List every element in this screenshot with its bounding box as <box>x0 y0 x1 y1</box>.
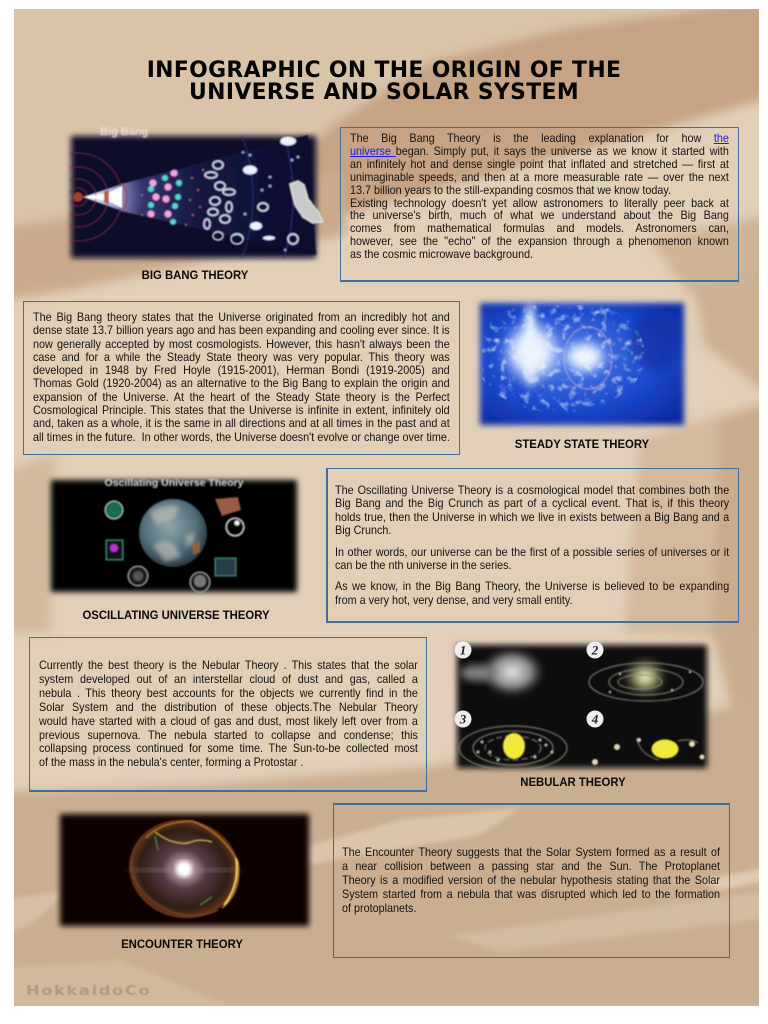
caption: oscillating universe theory: OSCILLATING UNIVERSE THEORY <box>82 608 270 622</box>
text block: steady state explanation: dense state 13.7 billion years ago and has been expanding and cooling ever since. It is <box>33 323 450 337</box>
text block: nebular explanation <box>38 658 418 769</box>
text block: nebular explanation: nebula . This theory best accounts for the objects we currently find in the <box>38 686 417 700</box>
text block: steady state explanation: all times in the future. In other words, the Universe doesn't evolve or change over time. <box>33 430 450 444</box>
image: big bang diagram <box>66 126 324 263</box>
text block: oscillating universe explanation: In other words, our universe can be the first of a possible series of universes or it <box>335 545 729 559</box>
icons: surrounding theory thumbnails <box>105 497 244 592</box>
image: oscillating universe <box>51 477 297 592</box>
text block: nebular explanation: Currently the best theory is the Nebular Theory . This states that the solar <box>38 658 417 672</box>
icon: thinker statue <box>290 181 323 223</box>
panel: encounter theory text <box>333 803 730 958</box>
text block: nebular explanation: of the mass in the nebula's center, forming a Protostar . <box>38 755 303 769</box>
text block: big bang explanation: 13.7 billion years to the still-expanding cosmos that we know today. <box>350 183 671 197</box>
text block: big bang explanation: as the cosmic microwave background. <box>350 247 533 261</box>
text block: steady state explanation: developed in 1948 by Fred Hoyle (1915-2001), Herman Bondi (1919-2005) and <box>33 363 450 377</box>
image title: oscillating universe: Oscillating Universe Theory <box>105 477 244 489</box>
text block: encounter explanation <box>342 845 720 915</box>
image label: big bang: Big Bang <box>100 126 148 138</box>
caption: steady state theory: STEADY STATE THEORY <box>515 437 649 451</box>
icons: stage numbers: 4 <box>591 712 599 726</box>
text block: big bang explanation: The Big Bang Theory is the leading explanation for how the <box>350 131 729 145</box>
text block: steady state explanation: The Big Bang theory states that the Universe originated from an incredibly hot and <box>33 310 450 324</box>
text block: oscillating universe explanation: holds true, then the Universe in which we live in exists between a Big Bang and a <box>335 510 729 524</box>
text block: oscillating universe explanation: Big Crunch. <box>335 523 391 537</box>
text block: big bang explanation: however, see the "echo" of the expansion through a phenomenon known <box>350 234 729 248</box>
icons: stage numbers <box>454 642 604 728</box>
text block: big bang explanation: an infinitely hot and dense single point that inflated and stretched — first at <box>350 157 729 171</box>
text block: oscillating universe explanation: from a very hot, very dense, and very small entity. <box>335 593 573 607</box>
text block: big bang explanation <box>350 131 729 261</box>
text block: steady state explanation: and, taken as a whole, it is the same in all directions and at all times in the past and at <box>33 416 450 430</box>
text block: nebular explanation: would have started with a cloud of gas and dust, most likely left over from a <box>38 714 417 728</box>
text block: steady state explanation: Cosmological Principle. This states that the Universe is infinite in extent, infinitely old <box>33 403 450 417</box>
panel: big bang text <box>340 127 739 282</box>
text block: oscillating universe explanation <box>335 483 730 607</box>
panel: steady state text <box>23 301 460 455</box>
text block: nebular explanation: system developed out of an interstellar cloud of dust and gas, called a <box>38 672 417 686</box>
icons: stage numbers: 3 <box>459 712 467 726</box>
text block: encounter explanation: System started from a nebula that was disrupted which led to the formation <box>342 887 720 901</box>
text block: oscillating universe explanation: As we know, in the Big Bang Theory, the Universe is believed to be expanding <box>335 579 729 593</box>
text block: oscillating universe explanation: can be the nth universe in the series. <box>335 558 512 572</box>
text block: big bang explanation: the universe's birth, much of what we understand about the Big Bang <box>350 208 729 222</box>
watermark: HokkaidoCo <box>26 983 151 999</box>
icon: earth <box>139 499 207 567</box>
text block: oscillating universe explanation: Big Bang and the Big Crunch as part of a cyclical event. That is, if this theory <box>335 496 729 510</box>
image: encounter theory nebula <box>60 810 309 928</box>
panel: oscillating universe text <box>326 468 739 623</box>
text block: nebular explanation: collapsing process continued for some time. The Sun-to-be collected most <box>38 741 417 755</box>
icons: stage numbers: 2 <box>591 642 599 658</box>
caption: nebular theory: NEBULAR THEORY <box>520 775 626 789</box>
title: UNIVERSE AND SOLAR SYSTEM <box>189 80 579 105</box>
image: steady state burst <box>480 303 684 425</box>
text block: encounter explanation: The Encounter Theory suggests that the Solar System formed as a result of <box>342 845 720 859</box>
text block: nebular explanation: previous supernova. The nebula started to collapse and condense; this <box>38 728 417 742</box>
text block: big bang explanation: unimaginable speeds, and then at a more measurable rate — over the next <box>350 170 729 184</box>
text block: big bang explanation: comes from mathematical formulas and models. Astronomers can, <box>350 221 729 235</box>
title <box>147 58 621 105</box>
text block: nebular explanation: Solar System and the distribution of these objects.The Nebular Theory <box>38 700 417 714</box>
text block: encounter explanation: of protoplanets. <box>342 901 416 915</box>
caption: encounter theory: ENCOUNTER THEORY <box>121 937 243 951</box>
text block: big bang explanation: universe began. Simply put, it says the universe as we know it started with <box>350 144 729 158</box>
text block: steady state explanation: case and for a while the Steady State theory was very popular. This theory was <box>33 350 450 364</box>
text block: encounter explanation: a near collision between a passing star and the Sun. The Protoplanet <box>342 859 720 873</box>
text block: big bang explanation: Existing technology doesn't yet allow astronomers to literally peer back at <box>350 196 729 210</box>
panel: nebular theory text <box>29 637 427 792</box>
text block: encounter explanation: Theory is a modified version of the nebular hypothesis stating that the Solar <box>342 873 720 887</box>
icons: stage numbers: 1 <box>460 642 466 658</box>
title: INFOGRAPHIC ON THE ORIGIN OF THE <box>147 58 621 83</box>
image: nebular theory stages <box>454 642 707 770</box>
text block: steady state explanation: Thomas Gold (1920-2004) as an alternative to the Big Bang to explain the origin and <box>33 376 450 390</box>
text block: steady state explanation: now generally accepted by most cosmologists. However, this hasn't always been the <box>33 337 450 351</box>
text block: steady state explanation: expansion of the Universe. At the heart of the Steady State theory is the Perfect <box>33 390 450 404</box>
text block: oscillating universe explanation: The Oscillating Universe Theory is a cosmological model that combines both the <box>335 483 729 497</box>
text block: steady state explanation <box>33 310 450 444</box>
caption: big bang theory: BIG BANG THEORY <box>142 268 248 282</box>
